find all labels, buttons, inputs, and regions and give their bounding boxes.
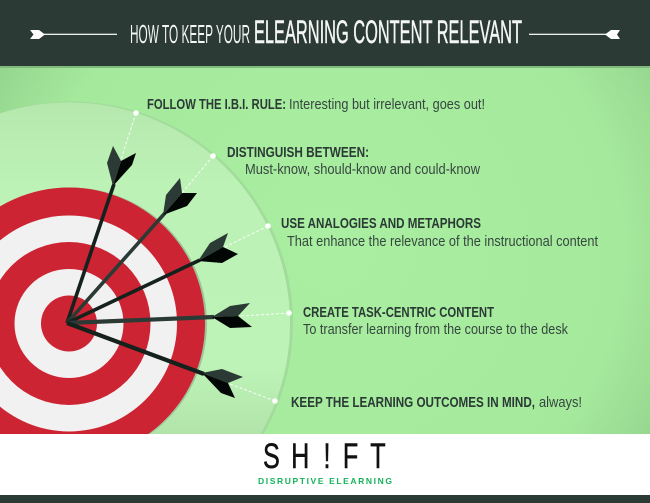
text: create task-centric content: To transfer learning from the course to the desk — [303, 322, 569, 338]
title: HOW TO KEEP YOUR — [130, 19, 250, 49]
text: follow the I.B.I. rule — [147, 96, 485, 113]
icon: left header arrow — [30, 30, 117, 39]
text: use analogies and metaphors — [281, 215, 598, 250]
text: use analogies and metaphors: USE ANALOGIES AND METAPHORS — [281, 215, 481, 232]
logo: SHIFT: DISRUPTIVE ELEARNING — [258, 476, 392, 486]
text: create task-centric content: CREATE TASK-CENTRIC CONTENT — [303, 304, 494, 321]
arrow 4 — [67, 303, 252, 328]
text: follow the I.B.I. rule: Interesting but irrelevant, goes out! — [289, 97, 485, 113]
green background panel — [0, 66, 650, 434]
text: keep the learning outcomes in mind: always! — [539, 395, 582, 411]
logo panel — [0, 434, 650, 495]
callout dots — [133, 110, 292, 404]
logo: SHIFT: SH!FT — [263, 437, 386, 476]
arrow 1 — [67, 146, 136, 323]
footer band — [0, 495, 650, 503]
text: distinguish between: Must-know, should-know and could-know — [245, 162, 480, 178]
text: keep the learning outcomes in mind: KEEP THE LEARNING OUTCOMES IN MIND, — [291, 394, 535, 411]
icon: right header arrow — [529, 30, 620, 39]
text: use analogies and metaphors: That enhance the relevance of the instructional content — [287, 234, 598, 250]
arrow 2 — [67, 178, 197, 323]
target — [0, 101, 293, 434]
text: follow the I.B.I. rule: FOLLOW THE I.B.I. RULE: — [147, 96, 286, 113]
title — [130, 14, 522, 50]
header band — [0, 0, 650, 68]
arrow 5 — [67, 323, 243, 398]
text: distinguish between: DISTINGUISH BETWEEN: — [227, 144, 369, 161]
text: create task-centric content — [303, 304, 569, 338]
callout connector lines — [121, 113, 289, 401]
text: distinguish between — [227, 144, 480, 178]
arrow 3 — [67, 233, 238, 323]
